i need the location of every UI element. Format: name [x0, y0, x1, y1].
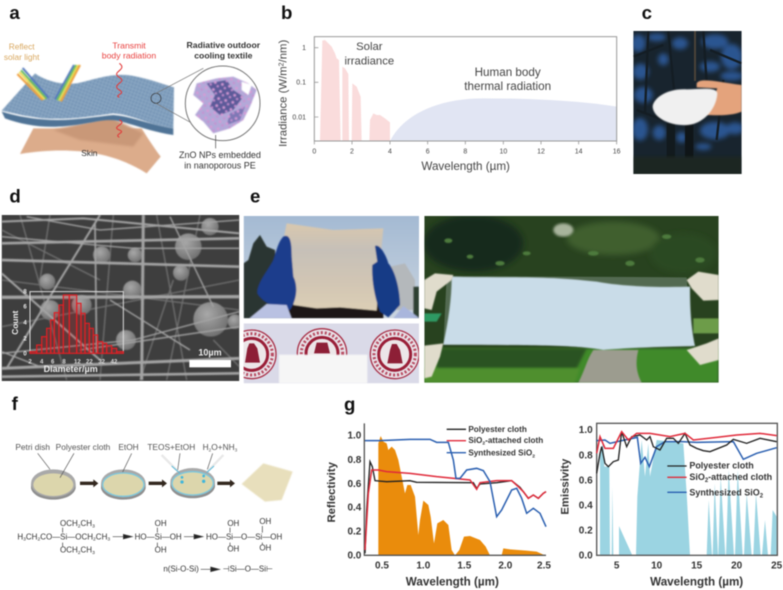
- step labels: 3: [235, 447, 238, 452]
- y axis tick labels: 1: [302, 45, 306, 52]
- legend: 2: [760, 493, 764, 499]
- dimer: HO—Si—O—Si—OH: [206, 532, 283, 541]
- x axis tick labels: 0: [312, 149, 316, 156]
- histogram x ticks: 22: [86, 360, 93, 366]
- dimer: OH: [227, 519, 240, 528]
- legend: [667, 461, 772, 499]
- histogram x ticks: 2: [28, 360, 32, 366]
- TEOS: OCH: [60, 546, 78, 555]
- blue body radiation area: [390, 98, 617, 141]
- x ticks: 25: [771, 561, 783, 572]
- histogram x ticks: 8: [62, 360, 66, 366]
- histogram x title: Diameter/µm: [44, 364, 98, 374]
- reflect label: Reflect: [9, 41, 35, 51]
- legend: SiO: [468, 436, 482, 445]
- dimer: OH: [259, 517, 272, 526]
- legend: Synthesized SiO: [689, 487, 760, 497]
- x ticks: 10: [651, 561, 663, 572]
- legend: Polyester cloth: [468, 425, 527, 434]
- histogram x ticks: 12: [74, 360, 81, 366]
- TEOS: 2: [78, 550, 81, 556]
- legend: -attached cloth: [708, 472, 772, 482]
- histogram x ticks: 4: [40, 360, 44, 366]
- legend: 2: [482, 441, 485, 447]
- TEOS: CH: [81, 546, 92, 555]
- textile title: Radiative outdoor: [187, 40, 261, 50]
- heading f: f: [12, 393, 19, 414]
- histogram y ticks: 0: [23, 352, 27, 358]
- x axis tick labels: 14: [575, 149, 583, 156]
- solar label: Solar: [356, 41, 383, 53]
- x ticks: 1.0: [416, 561, 431, 572]
- legend: Synthesized SiO: [468, 449, 532, 458]
- cyan atmospheric window: [600, 440, 777, 555]
- y title: Emissivity: [559, 458, 571, 515]
- histogram y ticks: 2: [23, 337, 27, 343]
- step labels: Petri dish: [15, 442, 50, 452]
- y axis title: 2: [278, 62, 285, 66]
- TEOS: 2: [78, 523, 81, 529]
- reflect label: solar light: [4, 52, 40, 62]
- histogram y ticks: 6: [23, 305, 27, 311]
- pink solar irradiance bands: [320, 40, 390, 141]
- blue curve: synthesized SiO2: [365, 439, 546, 527]
- red curve: [597, 432, 777, 453]
- TEOS reaction formula: [17, 517, 283, 574]
- SEM micrograph: [2, 215, 242, 381]
- scale bar: 10µm: [198, 347, 222, 357]
- step labels: 2: [209, 447, 212, 452]
- transmitted body radiation waves: [117, 63, 122, 137]
- x ticks: 5: [614, 561, 620, 572]
- histogram y ticks: 8: [23, 289, 27, 295]
- y ticks: 0.2: [579, 526, 593, 537]
- body radiation label: thermal radiation: [464, 80, 551, 93]
- step labels: Polyester cloth: [56, 442, 111, 452]
- solar label: irradiance: [344, 56, 394, 68]
- panel g right: emissivity chart: [559, 423, 783, 588]
- histogram x ticks: 32: [98, 360, 106, 366]
- y ticks: 1.0: [579, 425, 593, 436]
- y ticks: 0.8: [579, 450, 593, 461]
- legend: [447, 425, 543, 459]
- histogram bars: [30, 295, 123, 353]
- TEOS: CO—Si—OCH: [40, 532, 93, 541]
- photo: large textile outdoors: [423, 215, 719, 383]
- panel d: SEM image with histogram: [2, 186, 242, 381]
- heading d: d: [9, 186, 21, 207]
- histogram x ticks: 6: [51, 360, 55, 366]
- petri dish 3 with droppers: [162, 453, 223, 498]
- panel b: irradiance chart: [278, 2, 621, 173]
- silanol: OH: [155, 546, 167, 555]
- x axis tick labels: 6: [426, 149, 430, 156]
- x title: Wavelength (µm): [650, 575, 743, 588]
- reaction arrows: [113, 534, 220, 572]
- panel c: textile held in hand photo: [631, 2, 744, 177]
- ZnO pointer and caption: ZnO NPs embedded: [179, 150, 261, 160]
- petri dish 1: [31, 453, 76, 500]
- TEOS: OCH: [60, 519, 78, 528]
- x ticks: 2.0: [498, 561, 513, 572]
- heading g: g: [344, 394, 355, 415]
- polymer product: ⊣Si—O—Si⊢: [223, 565, 273, 574]
- x axis tick labels: 10: [499, 149, 507, 156]
- TEOS: 3: [23, 537, 26, 543]
- y ticks: 0.2: [347, 527, 362, 538]
- y ticks: 0.4: [579, 501, 593, 512]
- x axis tick labels: 12: [537, 149, 545, 156]
- TEOS: 2: [93, 537, 96, 543]
- ZnO pointer and caption: in nanoporous PE: [184, 160, 256, 170]
- y axis tick labels: 0.01: [292, 114, 306, 121]
- x title: Wavelength (µm): [406, 575, 499, 588]
- x ticks: 15: [691, 561, 703, 572]
- TEOS: 2: [37, 537, 40, 543]
- y axis title: Irradiance (W/m: [278, 66, 290, 147]
- magnified nanoporous circle: [151, 66, 260, 141]
- y ticks: 0.0: [579, 551, 593, 562]
- chart frame and axes: [314, 37, 617, 144]
- y title: Reflectivity: [326, 461, 338, 523]
- photo: [631, 31, 744, 177]
- legend: 2: [532, 453, 535, 459]
- x ticks: 0.5: [375, 561, 389, 572]
- x axis tick labels: 16: [613, 149, 621, 156]
- x axis tick labels: 2: [350, 149, 354, 156]
- transmit label: Transmit: [112, 41, 146, 51]
- x axis tick labels: 8: [463, 149, 467, 156]
- heading a: a: [9, 2, 20, 23]
- TEOS: H: [17, 532, 23, 541]
- process arrow 1: [80, 479, 98, 487]
- x ticks: 20: [731, 561, 743, 572]
- black curve: polyester cloth: [365, 462, 546, 553]
- body radiation label: Human body: [475, 66, 541, 79]
- dimer: OH: [227, 545, 240, 554]
- photo: logos under textile: [227, 323, 419, 383]
- TEOS: 3: [107, 537, 110, 543]
- legend: 2: [705, 478, 709, 484]
- polymerization: n(Si-O-Si): [163, 565, 199, 574]
- y axis tick labels: 0.1: [296, 80, 306, 87]
- silanol: OH: [155, 519, 167, 528]
- ZnO pointer and caption: [179, 135, 261, 170]
- dimer: OH: [259, 544, 272, 553]
- textile layer: [2, 73, 174, 135]
- y ticks: 0.8: [347, 455, 362, 466]
- x axis tick labels: 4: [388, 149, 392, 156]
- y ticks: 0.6: [579, 475, 593, 486]
- y ticks: 1.0: [347, 431, 362, 442]
- process arrow 3: [217, 479, 235, 487]
- silanol: HO—Si—OH: [135, 532, 182, 541]
- photo: gloved hands holding cloth: [244, 216, 419, 318]
- step labels: TEOS+EtOH: [147, 442, 195, 452]
- legend: Polyester cloth: [689, 461, 754, 471]
- blue curve: [597, 437, 777, 467]
- TEOS: 3: [92, 523, 95, 529]
- y ticks: 0.0: [347, 551, 362, 562]
- TEOS: CH: [81, 519, 92, 528]
- TEOS: CH: [96, 532, 108, 541]
- axes frame: [364, 423, 546, 555]
- histogram inset: [10, 289, 123, 374]
- y ticks: 0.6: [347, 479, 362, 490]
- red curve: SiO2-attached cloth: [365, 470, 546, 550]
- reflected solar light arrows: [17, 65, 80, 101]
- x axis title: Wavelength (µm): [421, 160, 510, 173]
- scale bar: [189, 347, 231, 367]
- black curve: [597, 432, 777, 473]
- legend: -attached cloth: [485, 436, 543, 445]
- y ticks: 0.4: [347, 503, 362, 514]
- textile title: cooling textile: [194, 51, 253, 61]
- panel f: synthesis process: [12, 393, 293, 574]
- finished cloth: [242, 463, 293, 502]
- step labels: EtOH: [118, 442, 139, 452]
- skin layer: Skin: [81, 148, 98, 158]
- transmit label: body radiation: [102, 51, 156, 61]
- step labels: O+NH: [211, 442, 235, 452]
- x ticks: 2.5: [537, 561, 551, 572]
- histogram y ticks: 4: [23, 321, 27, 327]
- bonds: [63, 526, 262, 547]
- petri dish 2: [101, 453, 146, 500]
- step labels: H: [203, 442, 209, 452]
- histogram y title: Count: [10, 310, 20, 335]
- skin layer: [20, 117, 161, 173]
- x ticks: 1.5: [457, 561, 472, 572]
- panel g left: reflectivity chart: [326, 394, 551, 588]
- heading b: b: [281, 2, 292, 23]
- axes frame: [597, 423, 777, 555]
- TEOS: CH: [26, 532, 38, 541]
- legend: SiO: [689, 472, 705, 482]
- panel a: radiative textile schematic: [2, 2, 261, 173]
- heading c: c: [642, 2, 652, 23]
- histogram frame: [30, 292, 123, 353]
- y axis title: /nm): [278, 40, 290, 62]
- orange solar spectrum: [378, 436, 545, 555]
- panel e: textile photos: [227, 186, 719, 383]
- heading e: e: [250, 186, 260, 207]
- process arrow 2: [149, 479, 167, 487]
- TEOS: 3: [92, 550, 95, 556]
- histogram x ticks: 42: [111, 360, 118, 366]
